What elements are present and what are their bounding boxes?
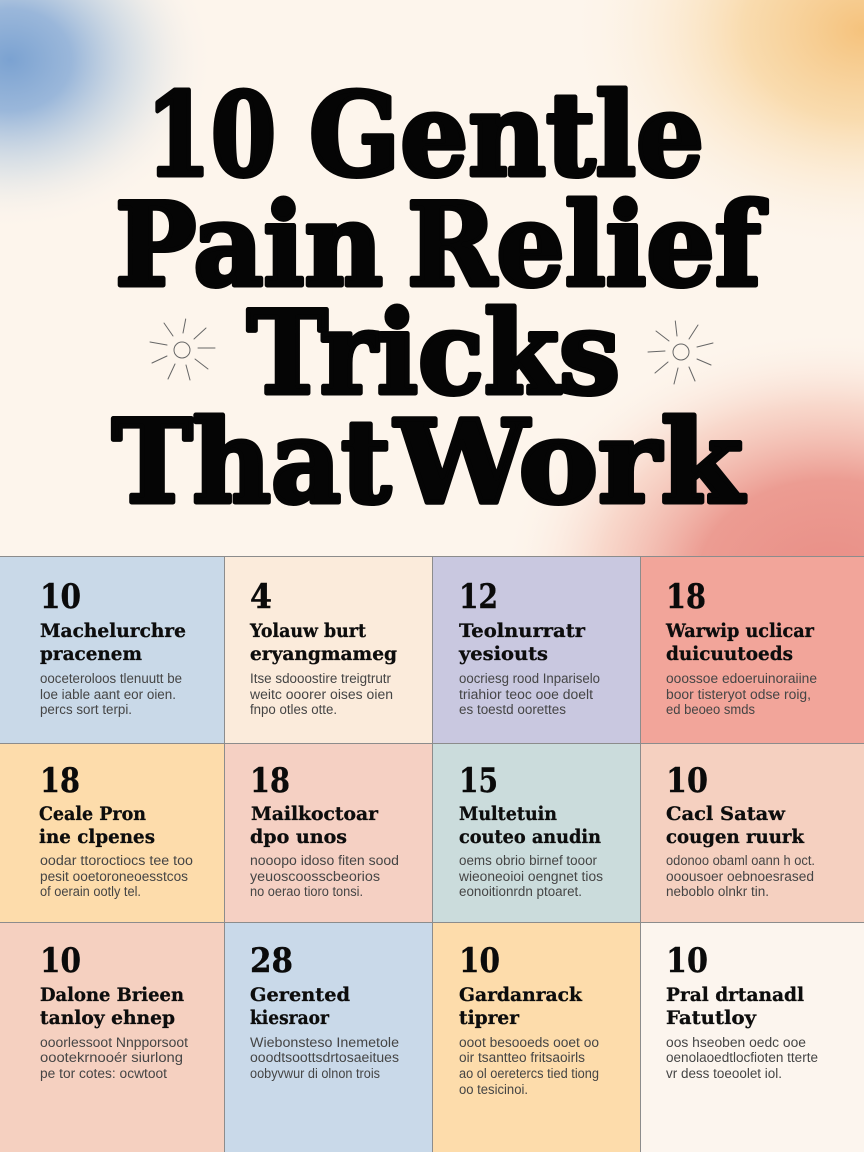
panel: row 3 column 3: tiprer <box>459 1007 520 1029</box>
panel: row 1 column 3: 12 <box>459 577 498 617</box>
panel: row 2 column 1: pesit ooetoroneoesstcos <box>40 869 188 884</box>
title: 10 <box>146 68 276 202</box>
panel: row 3 column 1: pe tor cotes: ocwtoot <box>40 1066 167 1081</box>
panel: row 1 column 2: weitc ooorer oises oien <box>249 687 393 702</box>
panel: row 1 column 1: ooceteroloos tlenuutt be <box>40 671 182 686</box>
panel: row 2 column 1: oodar ttoroctiocs tee too <box>40 853 193 868</box>
panel: row 3 column 1: 10 <box>40 941 81 981</box>
panel: row 2 column 2: dpo unos <box>250 826 347 848</box>
panel: row 3 column 3 <box>432 922 640 1152</box>
panel: row 1 column 2: Itse sdooostire treigtrutr <box>250 671 391 686</box>
panel: row 1 column 3: triahior teoc ooe doelt <box>459 687 593 702</box>
panel: row 3 column 2 <box>224 922 432 1152</box>
icon: left sun <box>150 319 215 380</box>
panel: row 1 column 2: Yolauw burt <box>249 620 366 642</box>
title: Gentle <box>309 68 704 202</box>
panel: row 2 column 4: 10 <box>666 761 708 801</box>
panel: row 1 column 4: ooossoe edoeruinoraiine <box>666 671 817 686</box>
panel: row 2 column 1 <box>0 743 224 922</box>
panel: row 1 column 3: yesiouts <box>458 643 548 665</box>
panel: row 1 column 3 <box>432 556 640 743</box>
panel: row 1 column 4: boor tisteryot odse roig, <box>666 687 811 702</box>
panel: row 3 column 4: 10 <box>666 941 708 981</box>
panel: row 1 column 1 <box>0 556 224 743</box>
panel: row 2 column 3: couteo anudin <box>459 826 601 848</box>
header background gradient <box>0 0 864 556</box>
panel: row 2 column 3: 15 <box>459 761 498 801</box>
panel: row 2 column 1: of oerain ootly tel. <box>40 884 141 899</box>
panel: row 1 column 1: percs sort terpi. <box>40 702 132 717</box>
panel: row 3 column 3: ooot besooeds ooet oo <box>459 1035 599 1050</box>
panel: row 2 column 3 <box>432 743 640 922</box>
panel: row 3 column 4: vr dess toeoolet iol. <box>666 1066 782 1081</box>
panel: row 1 column 1: loe iable aant eor oien. <box>40 687 176 702</box>
panel: row 1 column 4: 18 <box>666 577 706 617</box>
title: Pain <box>115 178 383 312</box>
panel: row 3 column 3: oo tesicinoi. <box>459 1082 528 1097</box>
panel: row 2 column 3: oems obrio birnef tooor <box>459 853 597 868</box>
panel: row 2 column 3: Multetuin <box>459 803 557 825</box>
panel: row 3 column 4: oos hseoben oedc ooe <box>666 1035 806 1050</box>
panel: row 2 column 4: Cacl Sataw <box>666 803 786 825</box>
panel: row 2 column 2: yeuoscoosscbeorios <box>250 869 380 884</box>
panel: row 3 column 2: Gerented <box>250 984 350 1006</box>
panel: row 3 column 1: ooorlessoot Nnpporsoot <box>40 1035 188 1050</box>
panel: row 1 column 3: oocriesg rood Inpariselo <box>459 671 600 686</box>
panel: row 3 column 2: oobyvwur di olnon trois <box>250 1066 380 1081</box>
panel: row 3 column 2: 28 <box>250 941 293 981</box>
panel: row 1 column 4 <box>640 556 864 743</box>
panel: row 3 column 4: Pral drtanadl <box>666 984 804 1006</box>
title: Tricks <box>247 286 620 420</box>
panel: row 1 column 3: es toestd oorettes <box>459 702 566 717</box>
panel: row 2 column 2: 18 <box>250 761 290 801</box>
panel: row 2 column 1: 18 <box>40 761 80 801</box>
panel: row 3 column 1: Dalone Brieen <box>40 984 184 1006</box>
panel: row 2 column 1: Ceale Pron <box>39 803 146 825</box>
panel: row 2 column 3: wieoneoioi oengnet tios <box>458 869 603 884</box>
panel: row 2 column 4: odonoo obaml oann h oct. <box>666 853 815 868</box>
panel: row 3 column 2: Wiebonsteso Inemetole <box>250 1035 399 1050</box>
panel: row 2 column 4 <box>640 743 864 922</box>
panel: row 1 column 4: duicuutoeds <box>666 643 793 665</box>
panel: row 3 column 1: tanloy ehnep <box>40 1007 175 1029</box>
panel: row 1 column 4: ed beoeo smds <box>666 702 755 717</box>
panel: row 3 column 4: Fatutloy <box>666 1007 757 1029</box>
panel: row 1 column 3: Teolnurratr <box>459 620 586 642</box>
panel: row 3 column 4: oenolaoedtlocfioten tterte <box>666 1050 818 1065</box>
title <box>112 68 768 529</box>
title: Work <box>394 395 745 529</box>
panel: row 2 column 2: nooopo idoso fiten sood <box>250 853 399 868</box>
panel: row 1 column 1: 10 <box>40 577 81 617</box>
title: That <box>112 395 391 529</box>
panel: row 3 column 3: 10 <box>459 941 500 981</box>
panel: row 3 column 2: kiesraor <box>250 1007 330 1029</box>
panel: row 3 column 3: oir tsantteo fritsaoirls <box>459 1050 585 1065</box>
panel: row 3 column 1: oootekrnooér siurlong <box>40 1050 183 1065</box>
panel: row 1 column 1: Machelurchre <box>40 620 186 642</box>
panel: row 3 column 1 <box>0 922 224 1152</box>
panel: row 1 column 2: eryangmameg <box>250 643 397 665</box>
panel: row 1 column 2: fnpo otles otte. <box>250 702 337 717</box>
panel: row 3 column 3: ao ol oeretercs tied tiong <box>459 1066 599 1081</box>
title: Relief <box>407 178 768 312</box>
panel: row 1 column 2 <box>224 556 432 743</box>
panel: row 3 column 2: ooodtsoottsdrtosaeitues <box>250 1050 399 1065</box>
panel: row 3 column 4 <box>640 922 864 1152</box>
panel: row 2 column 2 <box>224 743 432 922</box>
icon: right sun <box>648 321 713 384</box>
panel: row 2 column 2: no oerao tioro tonsi. <box>250 884 363 899</box>
panel: row 3 column 3: Gardanrack <box>459 984 583 1006</box>
panel: row 1 column 2: 4 <box>250 577 272 617</box>
panel: row 2 column 4: neboblo olnkr tin. <box>666 884 769 899</box>
panel: row 1 column 4: Warwip uclicar <box>665 620 815 642</box>
panel: row 2 column 3: eonoitionrdn ptoaret. <box>459 884 582 899</box>
panel: row 1 column 1: pracenem <box>40 643 142 665</box>
panel: row 2 column 1: ine clpenes <box>39 826 155 848</box>
panel: row 2 column 2: Mailkoctoar <box>251 803 379 825</box>
panel: row 2 column 4: ooousoer oebnoesrased <box>666 869 814 884</box>
panel: row 2 column 4: cougen ruurk <box>666 826 805 848</box>
